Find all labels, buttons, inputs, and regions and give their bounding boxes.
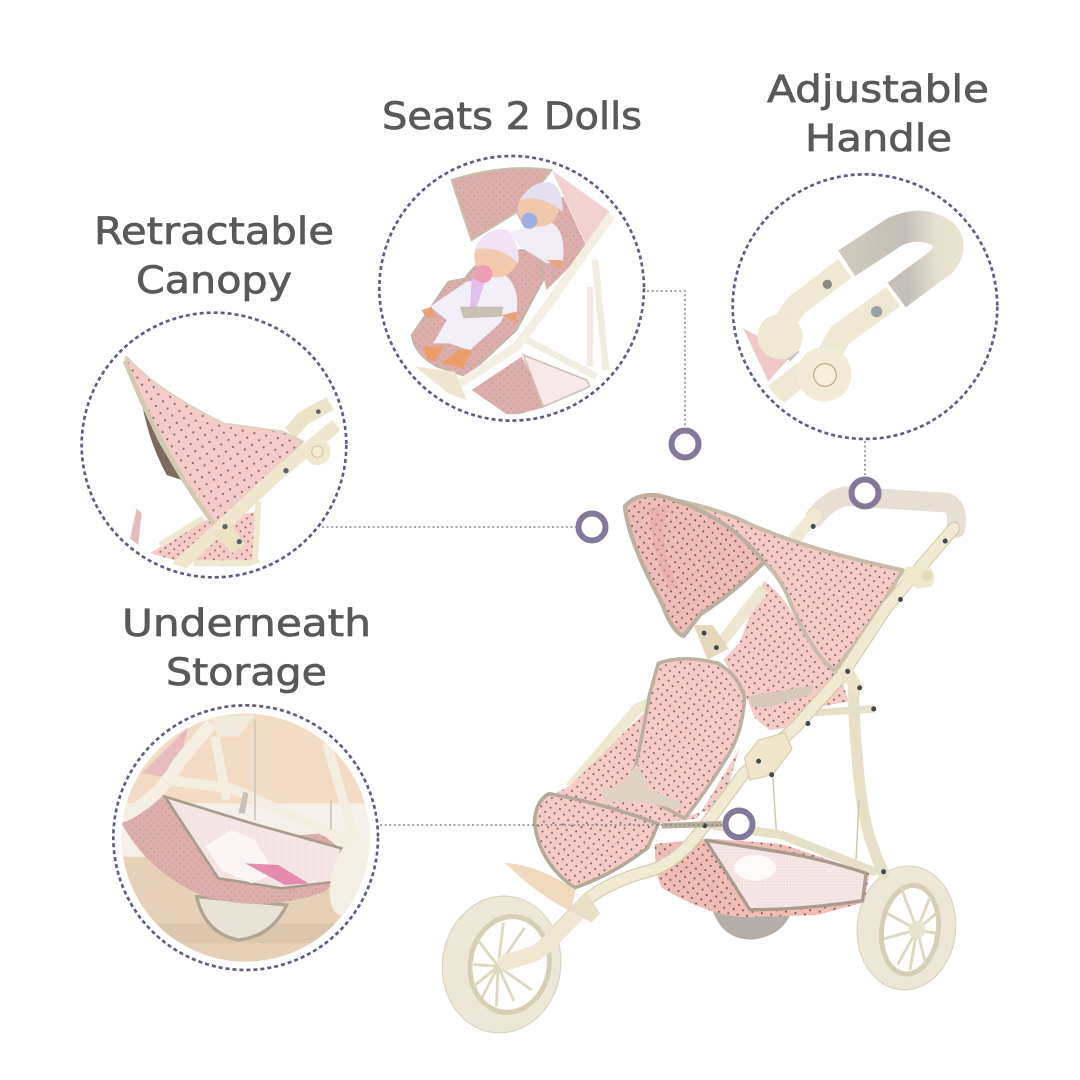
connector: canopy line — [322, 526, 577, 528]
main frame tube — [547, 528, 954, 941]
heading: Seats 2 Dolls: Seats 2 Dolls — [382, 95, 642, 138]
storage dashed circle — [113, 705, 378, 970]
footwell — [534, 794, 658, 888]
bolts — [871, 306, 882, 317]
hinge disc — [797, 347, 852, 402]
upper arm — [780, 268, 845, 328]
cross bar — [168, 780, 352, 843]
frame right — [460, 215, 612, 383]
footrest — [505, 863, 576, 912]
main frame tube shadow — [547, 528, 954, 941]
marker ring: storage — [726, 810, 752, 838]
front seat lower pink — [556, 713, 739, 824]
infographic: stroller features — [80, 73, 999, 1034]
floor shadow band — [156, 923, 336, 944]
front fork — [505, 913, 577, 963]
storage photo clip — [122, 714, 370, 962]
footrest bracket — [569, 891, 600, 922]
hinge button — [814, 364, 836, 386]
bottom mesh — [523, 355, 590, 407]
skirting band — [122, 803, 370, 856]
under basket pink — [655, 839, 870, 917]
handle arm — [290, 403, 330, 433]
heading: Underneath Storage: Underneath — [122, 602, 371, 645]
rear legs — [215, 737, 355, 840]
heading: Retractable Canopy — [94, 210, 334, 302]
right rear wheel — [851, 861, 962, 995]
wheel behind — [197, 897, 287, 940]
inside canopy shade — [142, 408, 181, 480]
mesh — [165, 797, 342, 888]
heading: Retractable Canopy: Retractable — [94, 210, 334, 253]
bottom fabric — [472, 357, 547, 417]
connector: storage line — [380, 824, 724, 826]
inset photo clip — [412, 168, 612, 417]
canopy outer top — [655, 497, 903, 671]
canopy front edge — [125, 361, 215, 525]
pink upper — [142, 727, 188, 777]
seat rail — [160, 502, 260, 563]
pink rear — [299, 834, 336, 846]
handle left arm — [792, 516, 815, 541]
canopy inner stripe — [650, 505, 678, 590]
frame rear bolts — [583, 524, 948, 907]
lower arm — [825, 297, 893, 362]
canopy outer — [552, 170, 610, 245]
rear leg and lower frame — [715, 689, 884, 873]
canopy joint — [694, 625, 729, 660]
mesh contents — [734, 855, 776, 880]
lower tube stub — [775, 372, 805, 395]
handle grip — [815, 496, 957, 528]
heading: Adjustable Handle: Adjustable — [767, 68, 989, 111]
wall — [126, 714, 366, 806]
front frame lock — [745, 733, 792, 780]
canopy — [452, 168, 552, 240]
frame joint under canopy — [840, 665, 864, 694]
back seat fabric — [723, 581, 848, 730]
handle dashed circle — [733, 174, 997, 439]
back seat — [517, 197, 587, 290]
grey trim — [765, 333, 800, 362]
hinge — [306, 442, 331, 465]
frame tube front — [662, 824, 722, 826]
pink fabric piece — [743, 328, 792, 382]
inset: handle — [733, 174, 997, 439]
strap — [130, 508, 142, 545]
bolts — [222, 409, 321, 544]
thin cord — [255, 720, 331, 830]
lower disc back — [757, 314, 803, 359]
middle rear wheel — [713, 912, 790, 940]
hinge button — [312, 446, 323, 457]
connector: handle line — [864, 441, 866, 478]
lower seat — [150, 512, 257, 562]
mesh pink item — [245, 863, 308, 885]
heading: Underneath Storage — [122, 602, 371, 694]
top joint — [212, 715, 255, 737]
front harness — [602, 764, 683, 809]
marker ring: handle — [852, 480, 878, 506]
heading: Adjustable Handle — [767, 68, 989, 160]
inset: storage — [105, 700, 392, 970]
front doll — [422, 229, 519, 368]
floor — [123, 856, 368, 962]
handle grip — [847, 226, 948, 295]
frame — [122, 723, 212, 817]
marker ring: canopy — [578, 514, 606, 540]
canopy dashed circle — [82, 313, 346, 577]
rear leg — [527, 260, 606, 377]
front seat back — [625, 659, 745, 818]
connector: seats line — [647, 291, 685, 428]
heading: Retractable Canopy: Canopy — [136, 259, 292, 302]
hook — [238, 792, 248, 813]
canopy inside — [625, 495, 764, 636]
heading: Adjustable Handle: Handle — [805, 117, 952, 160]
joint — [215, 522, 245, 553]
basket fabric — [122, 793, 335, 904]
main photo: jogging stroller — [432, 495, 962, 1043]
inset: canopy — [82, 313, 346, 577]
storage mesh — [706, 840, 866, 910]
seat side rail — [570, 703, 650, 787]
handle photo clip — [743, 226, 948, 402]
footrest — [415, 367, 467, 400]
back seat buckle strap — [748, 685, 813, 707]
hinge button — [922, 570, 932, 581]
inset: seats 2 dolls — [379, 156, 644, 421]
front seat — [412, 250, 543, 377]
heading: Underneath Storage: Storage — [166, 651, 327, 694]
seats dashed circle — [379, 156, 644, 421]
canopy fabric — [125, 357, 303, 525]
marker ring: seats — [672, 430, 698, 458]
back doll — [510, 182, 563, 270]
canopy arm — [715, 588, 764, 651]
canopy photo clip — [125, 357, 337, 568]
front wheel — [432, 886, 571, 1043]
canopy hinge — [901, 567, 934, 588]
mesh contents — [205, 830, 275, 883]
wheel front right — [323, 833, 377, 920]
main tube — [177, 425, 337, 568]
